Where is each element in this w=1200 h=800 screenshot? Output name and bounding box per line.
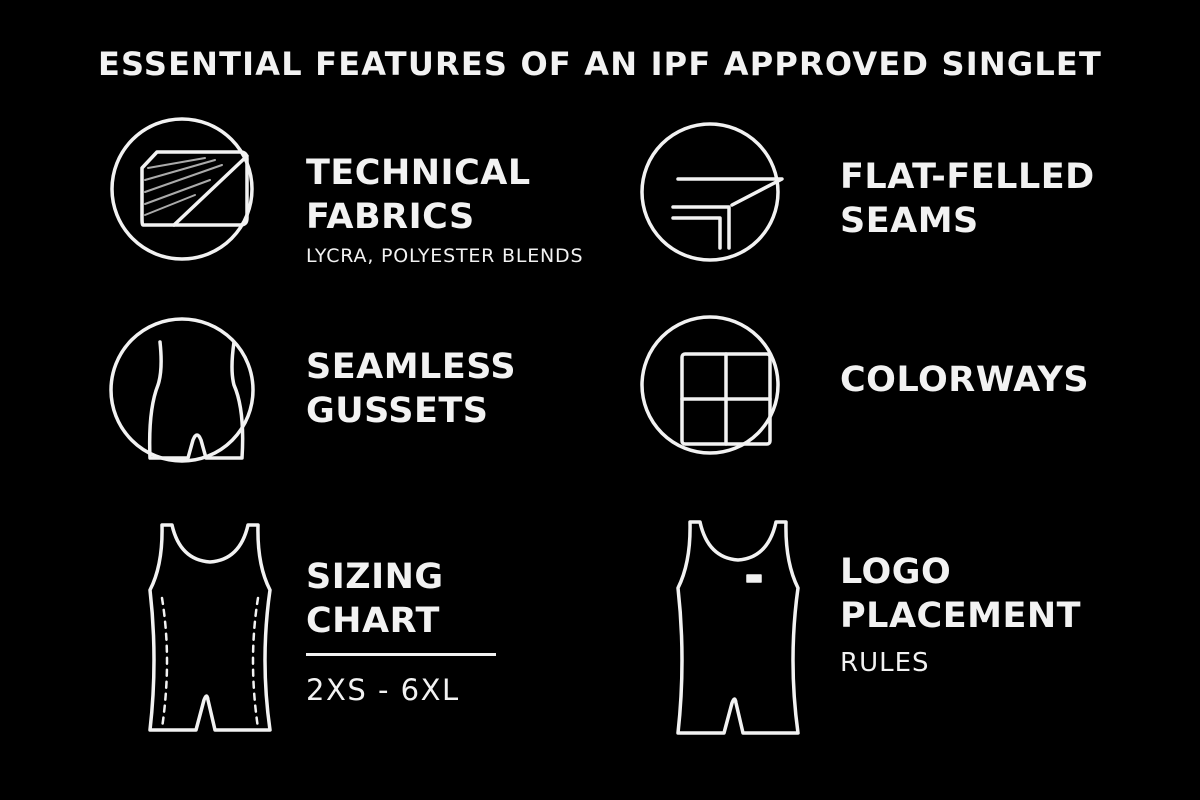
text: sizing chart: CHART xyxy=(306,601,440,641)
text: colorways: COLORWAYS xyxy=(840,360,1089,400)
icon: seamless gussets xyxy=(111,319,253,461)
icon: technical fabrics xyxy=(112,119,252,259)
text: logo placement: RULES xyxy=(840,648,930,678)
text: logo placement: PLACEMENT xyxy=(840,596,1081,636)
icon: flat-felled seams xyxy=(642,124,782,260)
icon: singlet logo xyxy=(678,522,798,733)
icon: colorways xyxy=(642,317,778,453)
text: 2XS - 6XL xyxy=(306,673,460,707)
text: seamless gussets: SEAMLESS xyxy=(306,347,516,387)
text: technical fabrics: LYCRA, POLYESTER BLENDS xyxy=(306,245,583,267)
title: ESSENTIAL FEATURES OF AN IPF APPROVED SINGLET xyxy=(98,45,1102,83)
text: technical fabrics: TECHNICAL xyxy=(306,153,531,193)
text: seamless gussets: GUSSETS xyxy=(306,391,488,431)
text: seamless gussets xyxy=(306,347,516,431)
text: flat-felled seams: FLAT-FELLED xyxy=(840,157,1095,197)
text: flat-felled seams: SEAMS xyxy=(840,201,979,241)
text: sizing chart xyxy=(306,557,496,707)
text: logo placement xyxy=(840,552,1081,678)
icon: singlet sizing xyxy=(150,525,270,730)
text: sizing chart: SIZING xyxy=(306,557,444,597)
text: flat-felled seams xyxy=(840,157,1095,241)
text: technical fabrics: FABRICS xyxy=(306,197,475,237)
text: logo placement: LOGO xyxy=(840,552,951,592)
text: technical fabrics xyxy=(306,153,583,267)
